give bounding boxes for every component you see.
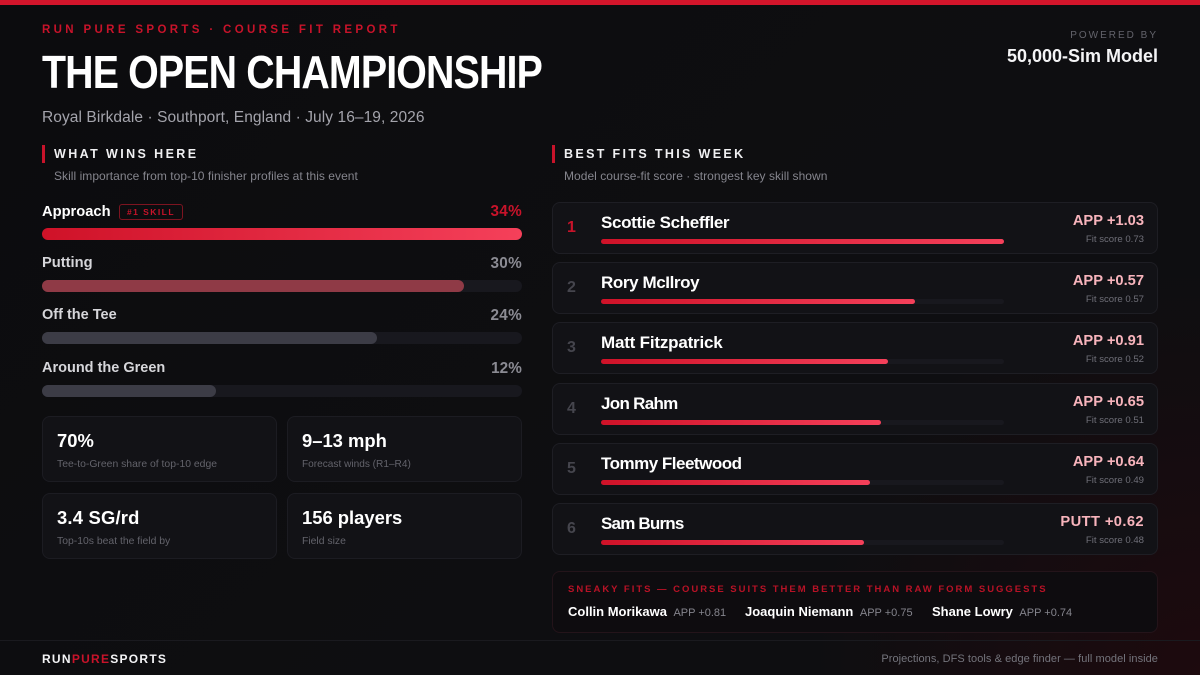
player row 6: Sam Burns — [601, 514, 684, 533]
player row 2 — [552, 262, 1158, 314]
powered by: POWERED BY — [1070, 30, 1158, 41]
best fits note: Model course-fit score · strongest key skill shown — [564, 169, 827, 183]
player row 1: APP +1.03 — [1073, 213, 1144, 229]
stat card: forecast winds: Forecast winds (R1–R4) — [302, 459, 411, 470]
heading: best fits this week — [552, 145, 1158, 163]
player row 4: Jon Rahm — [601, 394, 678, 413]
footer tagline: Projections, DFS tools & edge finder — full model inside — [881, 653, 1158, 665]
skill: putting — [42, 255, 522, 292]
model name: 50,000-Sim Model — [1007, 46, 1158, 66]
player row 5: APP +0.64 — [1073, 454, 1144, 470]
player row 2: Rory McIlroy — [601, 273, 699, 292]
skill: around the green: 12% — [491, 360, 522, 377]
player row 5 — [552, 443, 1158, 495]
player row 3 — [552, 322, 1158, 374]
stat card: forecast winds — [287, 416, 522, 482]
player row 1 — [552, 202, 1158, 254]
player row 1: Scottie Scheffler — [601, 213, 729, 232]
player row 4: Fit score 0.51 — [1086, 415, 1144, 426]
skill: around the green: Around the Green — [42, 360, 165, 376]
skill: approach: 34% — [490, 203, 522, 220]
player row 1: 1 — [567, 219, 576, 236]
player row 3: 3 — [567, 339, 576, 356]
player row 5: 5 — [567, 460, 576, 477]
stat card: field size: Field size — [302, 536, 346, 547]
stat card: strokes gained — [42, 493, 277, 559]
player row 2: Fit score 0.57 — [1086, 294, 1144, 305]
skill: off the tee: Off the Tee — [42, 307, 117, 323]
sneaky pick: Niemann: Joaquin Niemann APP +0.75 — [745, 604, 913, 619]
eyebrow: RUN PURE SPORTS · COURSE FIT REPORT — [42, 24, 401, 36]
stat card: field size: 156 players — [302, 507, 402, 528]
panel: what wins here — [42, 145, 522, 397]
player row 1: Fit score 0.73 — [1086, 234, 1144, 245]
player row 3: APP +0.91 — [1073, 333, 1144, 349]
player row 6: 6 — [567, 520, 576, 537]
stat card: tee-to-green share: Tee-to-Green share of top-10 edge — [57, 459, 217, 470]
skill: putting: Putting — [42, 255, 93, 271]
panel note: Skill importance from top-10 finisher profiles at this event — [54, 169, 358, 183]
skill: off the tee — [42, 307, 522, 344]
player row 2: APP +0.57 — [1073, 273, 1144, 289]
player row 6: PUTT +0.62 — [1060, 514, 1144, 530]
callout: sneaky fits — [552, 571, 1158, 633]
stat card: forecast winds: 9–13 mph — [302, 430, 387, 451]
player row 3: Matt Fitzpatrick — [601, 333, 722, 352]
sneaky pick: Morikawa: Collin Morikawa APP +0.81 — [568, 604, 726, 619]
stat card: strokes gained: 3.4 SG/rd — [57, 507, 140, 528]
stat card: strokes gained: Top-10s beat the field by — [57, 536, 170, 547]
sneaky pick: Lowry: Shane Lowry APP +0.74 — [932, 604, 1072, 619]
skill: putting: 30% — [490, 255, 522, 272]
callout heading: SNEAKY FITS — COURSE SUITS THEM BETTER THAN RAW FORM SUGGESTS — [568, 584, 1048, 595]
player row 4: 4 — [567, 400, 576, 417]
player row 4 — [552, 383, 1158, 435]
badge: #1 skill: #1 SKILL — [127, 207, 175, 217]
top accent bar — [0, 0, 1200, 5]
stat card: tee-to-green share: 70% — [57, 430, 94, 451]
player row 5: Tommy Fleetwood — [601, 454, 741, 473]
player row 2: 2 — [567, 279, 576, 296]
heading: best fits this week: BEST FITS THIS WEEK — [564, 147, 745, 161]
skill: around the green — [42, 360, 522, 397]
heading: what wins here: WHAT WINS HERE — [54, 147, 198, 161]
title: THE OPEN CHAMPIONSHIP — [42, 46, 542, 98]
stat card: field size — [287, 493, 522, 559]
footer logo: RUNPURESPORTS — [42, 652, 167, 666]
player row 4: APP +0.65 — [1073, 394, 1144, 410]
skill: approach — [42, 203, 522, 240]
subtitle: Royal Birkdale · Southport, England · July 16–19, 2026 — [42, 109, 425, 126]
player row 3: Fit score 0.52 — [1086, 354, 1144, 365]
badge: #1 skill — [119, 204, 183, 220]
player row 5: Fit score 0.49 — [1086, 475, 1144, 486]
heading: what wins here — [42, 145, 522, 163]
footer — [0, 640, 1200, 675]
skill: off the tee: 24% — [490, 307, 522, 324]
stat card: tee-to-green share — [42, 416, 277, 482]
skill: approach: Approach — [42, 204, 111, 220]
player row 6: Fit score 0.48 — [1086, 535, 1144, 546]
player row 6 — [552, 503, 1158, 555]
